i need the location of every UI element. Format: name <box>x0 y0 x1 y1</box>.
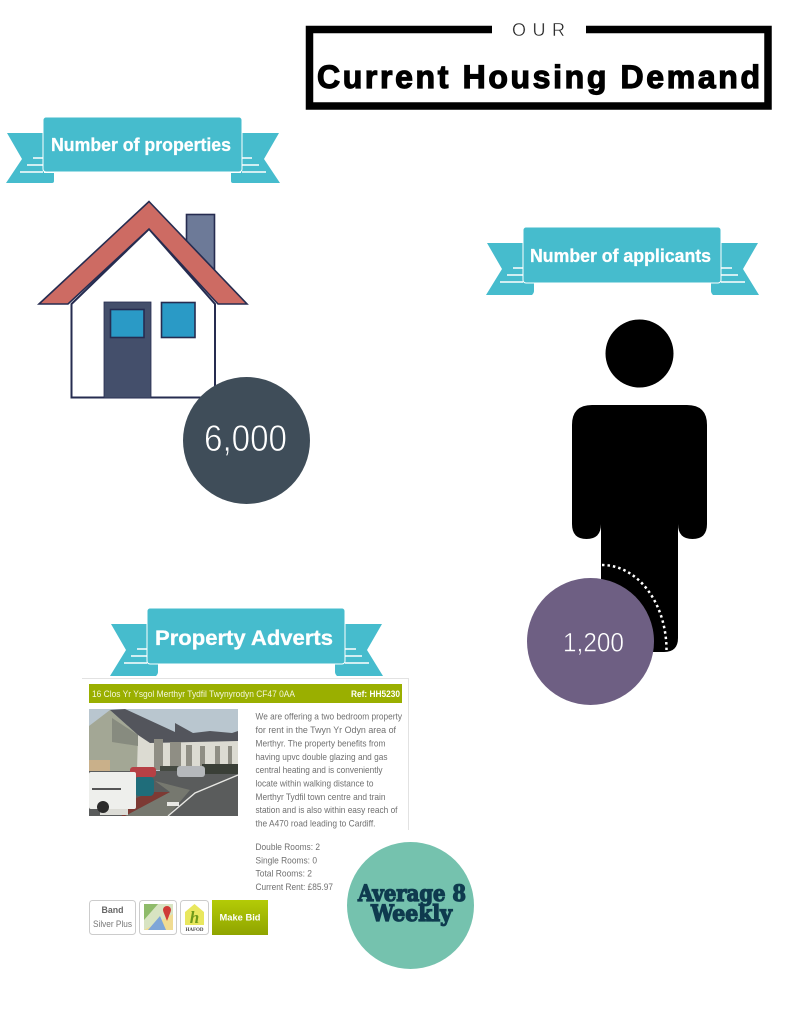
advert room details <box>256 842 333 892</box>
button: band <box>90 900 136 934</box>
title frame <box>310 30 768 106</box>
button: band: Silver Plus <box>93 919 133 929</box>
advert description: having upvc double glazing and gas <box>256 752 388 762</box>
stat circle: Average 8 Weekly <box>347 842 474 969</box>
stat circle: Average 8 Weekly: Weekly <box>370 901 453 927</box>
roof <box>39 202 247 304</box>
advert description <box>256 712 402 828</box>
panel: property advert listing <box>82 678 408 935</box>
banner: Property Adverts: Property Adverts <box>155 627 333 650</box>
button: Hafod logo: HAFOD <box>185 928 204 933</box>
heading: Current Housing Demand: Current Housing Demand <box>317 59 760 95</box>
window <box>162 302 195 338</box>
eyebrow: OUR: OUR <box>512 20 565 40</box>
stat circle: 6,000 properties <box>183 377 310 504</box>
stat circle: 1,200 applicants <box>527 578 654 705</box>
advert room details: Single Rooms: 0 <box>256 856 317 866</box>
door <box>104 302 151 398</box>
banner: Number of properties: Number of properties <box>51 135 231 155</box>
button: Hafod logo: h <box>190 908 199 927</box>
title block <box>310 20 768 106</box>
advert description: Merthyr. The property benefits from <box>256 738 386 748</box>
button: Make Bid: Make Bid <box>220 912 261 924</box>
banner: Property Adverts <box>110 608 383 676</box>
advert header bar <box>89 684 402 703</box>
button: Hafod logo <box>180 900 208 934</box>
stat circle: 6,000 properties: 6,000 <box>204 418 287 459</box>
advert description: central heating and is conveniently <box>256 765 383 775</box>
stat circle: 1,200 applicants: 1,200 <box>563 628 624 658</box>
advert description: the A470 road leading to Cardiff. <box>256 818 376 828</box>
advert room details: Current Rent: £85.97 <box>256 882 333 892</box>
banner: Number of properties <box>6 117 280 183</box>
house wall <box>72 229 215 398</box>
banner: Number of applicants: Number of applicants <box>530 246 711 266</box>
advert header bar: Ref: HH5230 <box>351 689 400 699</box>
chimney <box>186 214 214 276</box>
advert description: station and is also within easy reach of <box>256 805 398 815</box>
advert description: for rent in the Twyn Yr Odyn area of <box>256 725 396 735</box>
door window <box>110 310 144 338</box>
advert room details: Total Rooms: 2 <box>256 868 312 878</box>
advert header bar: 16 Clos Yr Ysgol Merthyr Tydfil Twynyrodyn CF47 0AA <box>92 689 295 699</box>
icon: person <box>572 320 707 652</box>
icon: house <box>39 202 247 398</box>
advert photo: terrace of houses <box>89 709 238 816</box>
button: Make Bid <box>212 900 268 935</box>
button: band: Band <box>102 905 124 915</box>
person head <box>606 320 674 388</box>
banner: Number of applicants <box>486 227 759 295</box>
advert description: Merthyr Tydfil town centre and train <box>256 792 386 802</box>
person body <box>572 405 707 652</box>
dotted arc <box>602 565 666 650</box>
stat circle: Average 8 Weekly: Average 8 <box>357 881 466 907</box>
advert description: locate within walking distance to <box>256 778 374 788</box>
advert room details: Double Rooms: 2 <box>256 842 320 852</box>
button: map icon <box>140 900 176 934</box>
advert description: We are offering a two bedroom property <box>256 712 402 722</box>
